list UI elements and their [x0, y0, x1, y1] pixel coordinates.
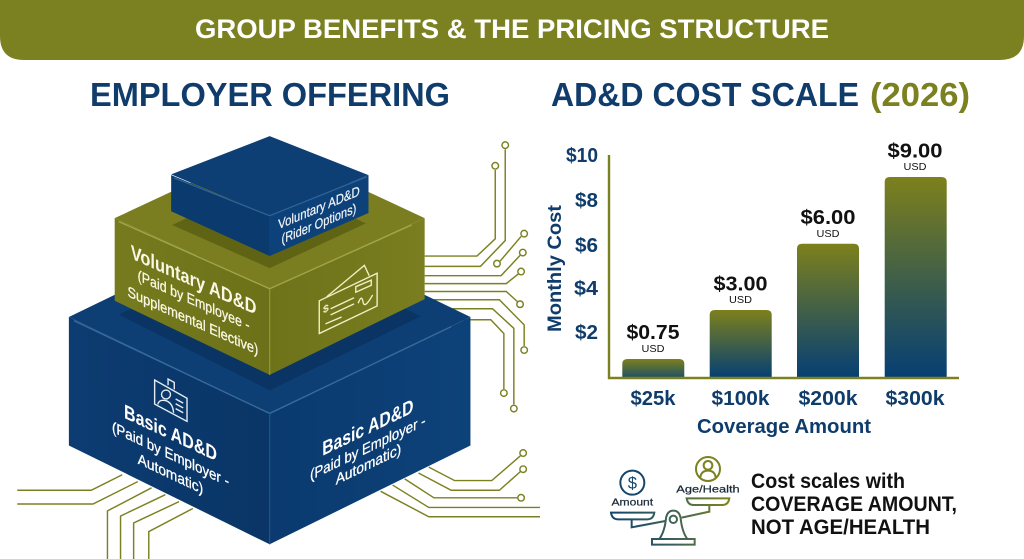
heading: employer offering: EMPLOYER OFFERING — [90, 76, 450, 113]
tier: voluntary AD&D — [115, 146, 425, 375]
text: basic AD&D right face: Automatic) — [336, 441, 401, 489]
value labels: USD — [904, 161, 927, 173]
heading: AD&D cost scale: AD&D COST SCALE — [551, 76, 859, 113]
callout: cost scales with coverage amount — [751, 470, 957, 539]
text: basic AD&D left face: Automatic) — [138, 451, 203, 498]
label: age/health: Age/Health — [676, 485, 740, 496]
text: basic AD&D right face: Basic AD&D — [322, 395, 413, 461]
y axis labels: $10 — [566, 145, 598, 167]
y axis labels: $4 — [574, 278, 599, 300]
y axis labels: $2 — [575, 322, 598, 344]
label: amount: Amount — [611, 498, 653, 509]
y axis labels: $6 — [575, 235, 598, 257]
circuit traces — [17, 142, 540, 559]
callout: cost scales with coverage amount: Cost scales with — [751, 470, 905, 493]
value labels: $3.00 — [714, 274, 768, 296]
value labels: USD — [729, 294, 752, 306]
value labels: $0.75 — [626, 322, 680, 344]
x axis labels: $25k — [630, 388, 676, 410]
value labels: $6.00 — [800, 207, 856, 229]
icon label: dollar sign on cheque: $ — [323, 302, 329, 316]
title: GROUP BENEFITS & THE PRICING STRUCTURE — [195, 14, 829, 44]
bars — [622, 177, 947, 378]
text: basic AD&D left face: (Paid by Employer - — [112, 419, 229, 491]
text: basic AD&D left face: Basic AD&D — [124, 401, 217, 466]
x axis labels: $100k — [712, 388, 770, 410]
callout: cost scales with coverage amount: NOT AGE/HEALTH — [751, 516, 930, 539]
value labels — [626, 140, 942, 355]
text: rider options: Voluntary AD&D — [278, 184, 360, 233]
text: basic AD&D right face: (Paid by Employer - — [310, 413, 426, 484]
axes — [609, 155, 959, 378]
value labels: USD — [642, 343, 665, 355]
callout: cost scales with coverage amount: COVERAGE AMOUNT, — [751, 493, 957, 516]
x axis labels — [630, 388, 945, 410]
y axis labels: $8 — [575, 190, 598, 212]
x axis labels: $300k — [886, 388, 945, 410]
text: voluntary AD&D left face: Supplemental Elective) — [127, 284, 258, 359]
icon: cheque — [319, 265, 377, 334]
text: voluntary AD&D left face: Voluntary AD&D — [131, 241, 256, 320]
value labels: $9.00 — [888, 140, 942, 162]
value labels: USD — [816, 228, 840, 240]
bar chart: monthly cost by coverage amount — [545, 140, 959, 438]
x axis labels: $200k — [798, 388, 858, 410]
x axis title: Coverage Amount — [697, 416, 871, 438]
y axis labels — [566, 145, 599, 344]
heading: AD&D cost scale: (2026) — [870, 76, 970, 113]
icon: person — [696, 457, 720, 481]
tier: voluntary rider options — [171, 136, 369, 256]
icon: dollar coin: $ — [628, 474, 637, 493]
text: voluntary AD&D left face — [127, 241, 258, 359]
icon: balance scale — [611, 457, 740, 545]
tier: basic AD&D — [69, 220, 470, 544]
panel: employer offering pyramid — [17, 136, 540, 559]
icon: ID badge — [155, 379, 187, 421]
text: rider options: (Rider Options) — [282, 201, 356, 248]
y axis title: Monthly Cost — [545, 204, 566, 332]
text: voluntary AD&D left face: (Paid by Employee - — [138, 268, 250, 334]
header band — [0, 0, 1024, 60]
